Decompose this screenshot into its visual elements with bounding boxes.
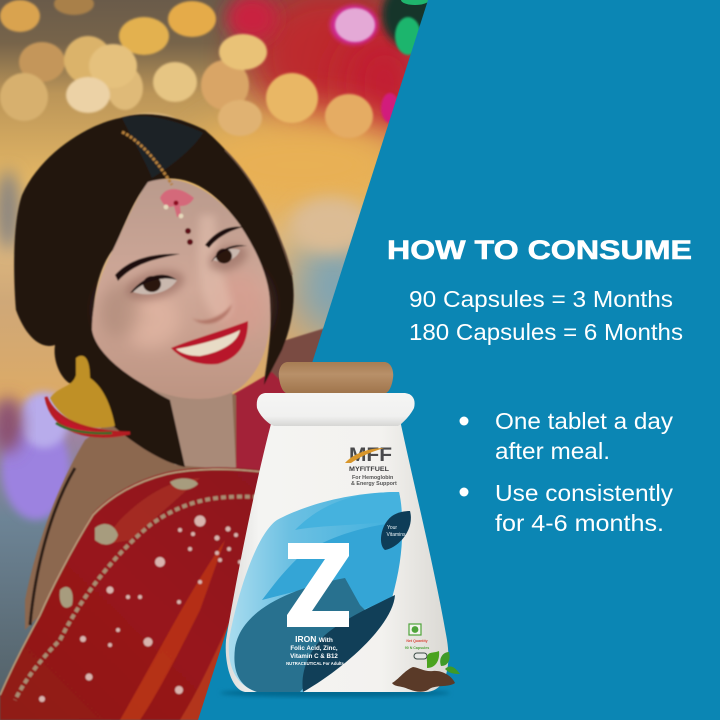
bare back and neck	[25, 380, 236, 630]
usage instruction: one tablet a day: One tablet a day	[495, 408, 673, 434]
product bottle	[220, 362, 460, 697]
bottle cap	[279, 362, 393, 393]
blouse	[232, 372, 300, 475]
blouse strap	[30, 468, 75, 625]
veg mark and quantity: Net Quantity	[406, 639, 428, 643]
brand logo MFF: & Energy Support	[351, 481, 397, 487]
capsule pack sizes	[409, 286, 683, 345]
bindi dots	[185, 228, 191, 234]
face	[92, 179, 270, 399]
brand logo MFF	[345, 445, 397, 487]
capsule pack sizes: 90 Capsules = 3 Months	[409, 286, 673, 312]
blue diagonal panel	[198, 0, 720, 720]
leaf label: light blue	[229, 492, 402, 692]
saree with embroidered border	[0, 467, 263, 720]
label text: iron formula: Folic Acid, Zinc,	[290, 645, 338, 652]
usage instruction: use consistently	[460, 480, 673, 536]
capsule pack sizes: 180 Capsules = 6 Months	[409, 319, 683, 345]
veg mark and quantity	[405, 624, 429, 659]
label text: iron formula	[286, 634, 345, 666]
icon: green leaves	[427, 651, 460, 674]
label text: iron formula: NUTRACEUTICAL For Adults	[286, 661, 345, 666]
usage instruction: use consistently: Use consistently	[495, 480, 673, 506]
small dark leaf badge: Vitamins	[386, 532, 406, 538]
woman in red saree	[0, 114, 335, 720]
maang tikka jewellery	[122, 132, 172, 185]
hair	[14, 114, 294, 467]
usage instruction: use consistently: for 4-6 months.	[495, 510, 664, 536]
usage instruction: one tablet a day	[460, 408, 673, 464]
bottle shadow	[220, 689, 450, 697]
leaf label: mid teal	[234, 578, 367, 692]
eyes	[133, 277, 177, 294]
shadowed area behind shoulder	[270, 325, 335, 400]
icon: herb root pieces	[392, 667, 455, 692]
brand logo MFF: For Hemoglobin	[352, 475, 393, 481]
lips and teeth	[171, 321, 248, 364]
eyebrows	[115, 254, 180, 281]
bottle body	[226, 420, 448, 692]
eye sockets	[123, 264, 187, 306]
bottle collar	[257, 393, 415, 426]
label text: iron formula: Vitamin C & B12	[290, 653, 338, 660]
usage instruction: one tablet a day: after meal.	[495, 438, 610, 464]
label text: iron formula: IRON With	[295, 634, 333, 644]
nose tip shadow	[192, 304, 232, 324]
photo background: festive bokeh lights	[0, 0, 440, 720]
big Z letter	[287, 543, 349, 627]
small dark leaf badge	[381, 511, 411, 550]
small dark leaf badge: Your	[387, 525, 397, 531]
earring	[50, 356, 115, 428]
heading: how to consume: HOW TO CONSUME	[387, 235, 692, 265]
leaf label: dark navy	[302, 595, 395, 692]
veg mark and quantity: 90 N Capsules	[405, 646, 429, 650]
brand logo MFF: MYFITFUEL	[349, 466, 389, 473]
brand logo MFF: MFF	[349, 445, 392, 466]
